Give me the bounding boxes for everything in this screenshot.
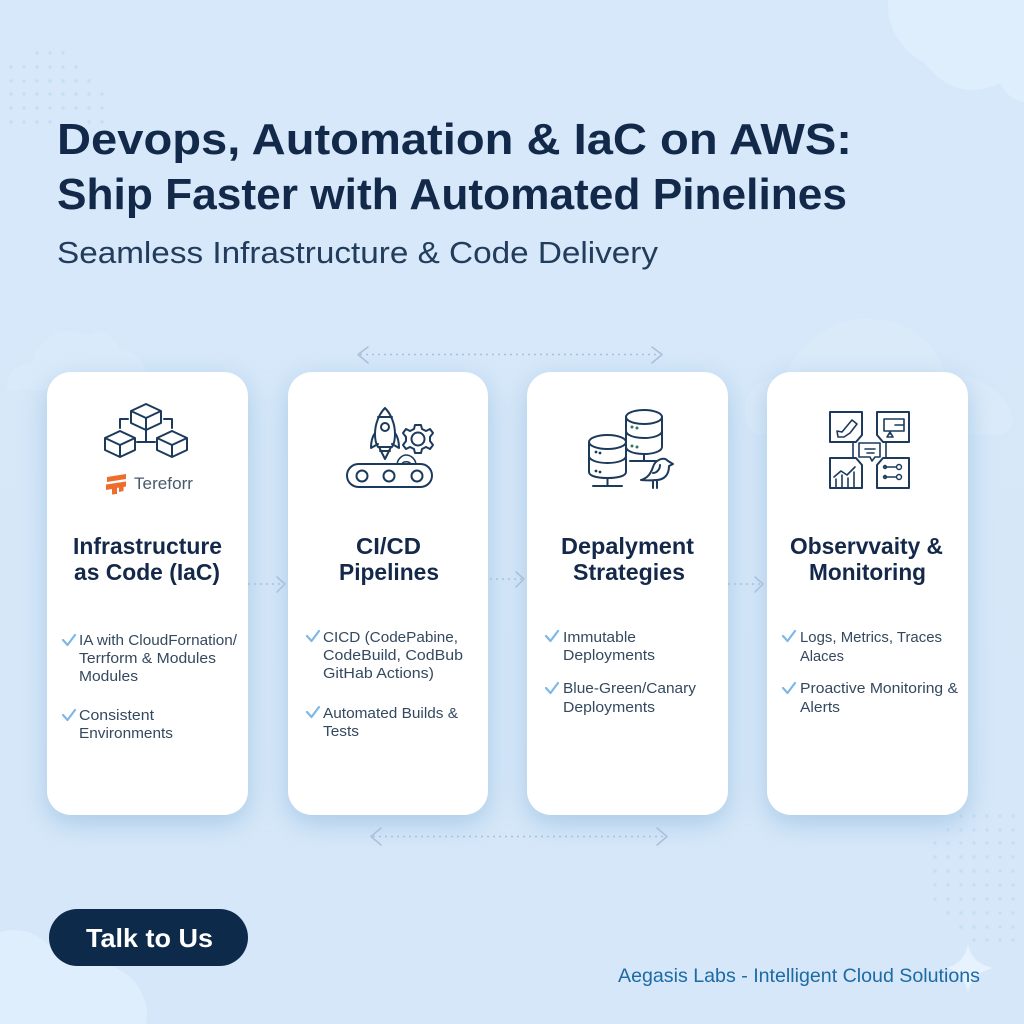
title [57,115,852,219]
button: talk to us: Talk to Us [86,923,213,953]
checklist: Consistent [79,708,154,724]
checklist [546,630,697,716]
checklist: Proactive Monitoring & [800,681,958,697]
icon: connected cubes [105,404,187,457]
heading: Infrastructure [73,533,222,559]
heading: Observvaity & [790,533,943,559]
checklist: IA with CloudFornation/ [79,633,238,649]
icon: rocket on conveyor with gears [347,408,433,487]
heading: Pipelines [339,559,439,585]
footer brand line: Aegasis Labs - Intelligent Cloud Solutions [618,965,980,987]
panel: ci/cd pipelines [288,372,488,815]
checklist: Environments [79,726,173,742]
heading: CI/CD [356,533,421,559]
dot pattern: bottom right [933,814,1015,942]
arrow: card 3 to card 4 [728,577,763,592]
icon: databases and canary bird [589,410,673,488]
checklist: Automated Builds & [323,706,458,722]
decorative sparkle [947,944,993,993]
checklist: CodeBuild, CodBub [323,648,463,664]
checklist: Alaces [800,649,844,665]
panel: infrastructure as code [47,372,248,815]
checklist: Modules [79,669,138,685]
heading: Strategies [573,559,685,585]
title: Devops, Automation & IaC on AWS: [57,115,852,164]
checklist: Tests [323,724,359,740]
heading [790,533,943,585]
panel: observability and monitoring [767,372,968,815]
arrow: card 1 to card 2 [248,577,285,592]
top arrow [358,347,662,363]
panel: deployment strategies [527,372,728,815]
logo: Tereforr [106,474,193,494]
heading [561,533,694,585]
checklist: Logs, Metrics, Traces [800,630,942,646]
heading [339,533,439,585]
checklist: Alerts [800,700,840,716]
checklist: Immutable [563,630,636,646]
title: Ship Faster with Automated Pinelines [57,170,847,219]
icon: monitoring dashboards [830,412,909,488]
checklist: Deployments [563,700,655,716]
checklist: Terrform & Modules [79,651,216,667]
heading: as Code (IaC) [74,559,220,585]
checklist [307,630,463,740]
checklist [63,633,238,742]
bottom arrow [371,828,667,845]
heading [73,533,222,585]
subtitle: Seamless Infrastructure & Code Delivery [57,235,659,270]
logo: Tereforr: Tereforr [134,474,193,493]
dot pattern: top left [9,51,104,124]
heading: Monitoring [809,559,926,585]
button: talk to us [49,909,248,966]
checklist: Blue-Green/Canary [563,681,697,697]
checklist: CICD (CodePabine, [323,630,458,646]
checklist: GitHab Actions) [323,666,434,682]
checklist [783,630,958,716]
heading: Depalyment [561,533,694,559]
arrow: card 2 to card 3 [490,572,524,587]
card shadows [47,380,968,823]
checklist: Deployments [563,648,655,664]
